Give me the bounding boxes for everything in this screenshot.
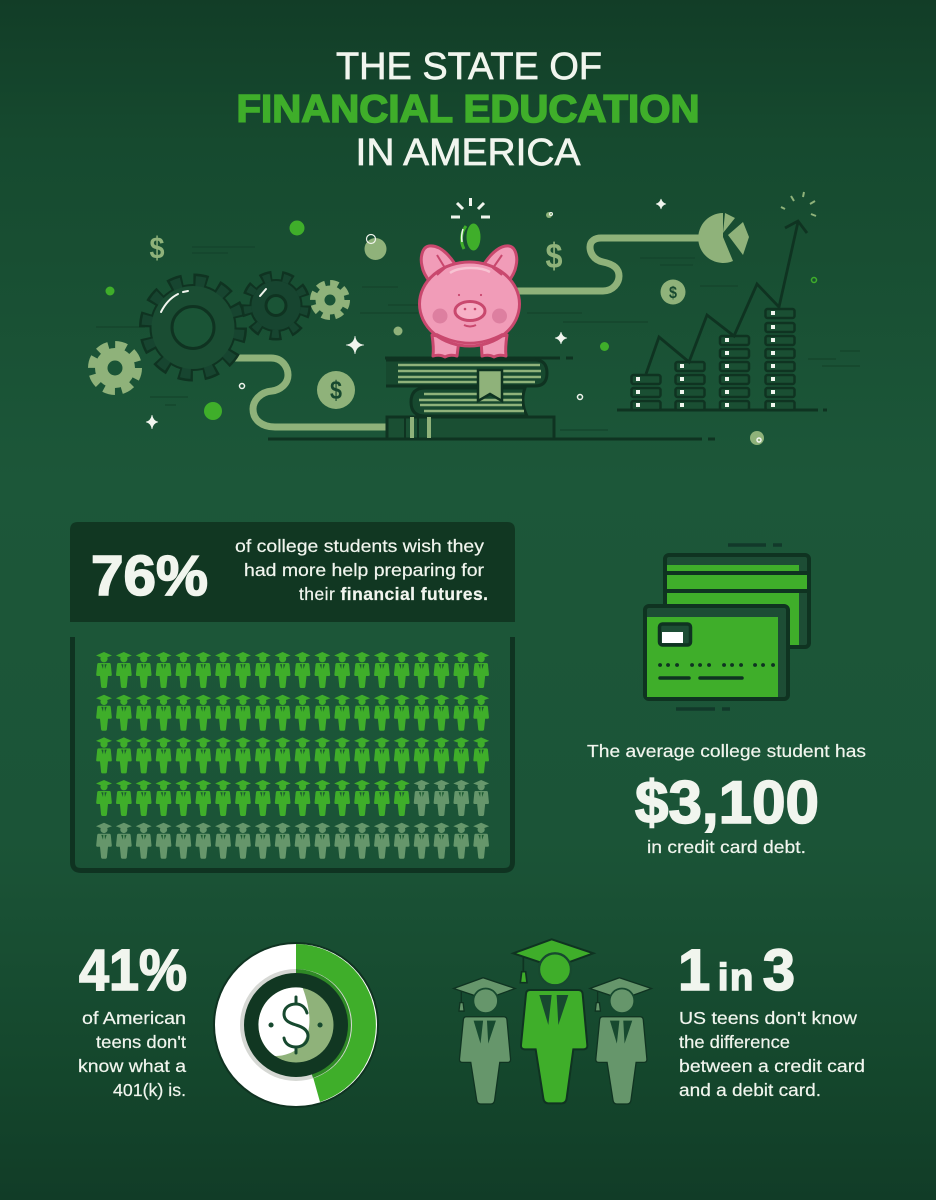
illustration: finance scene — [92, 192, 860, 445]
icon: three graduates — [454, 939, 651, 1104]
icon: dollar signs: $ — [330, 375, 342, 405]
icon: credit cards — [645, 545, 809, 709]
icon: small light gear — [314, 284, 346, 316]
header text — [235, 536, 488, 604]
title: FINANCIAL EDUCATION — [236, 88, 700, 131]
icon: left light gear — [92, 346, 138, 390]
pictogram: 76 of 100 graduates — [96, 652, 489, 859]
text: average college student debt — [587, 741, 866, 857]
text: 41% of teens: 41% — [79, 938, 187, 1003]
donut chart: 41% — [213, 942, 379, 1108]
icon: dollar signs — [150, 230, 686, 409]
icon: dollar sign — [271, 997, 320, 1053]
panel header — [70, 522, 515, 622]
text: average college student debt: in credit card debt. — [647, 837, 806, 857]
text: 1 in 3 teens: US teens don't know — [679, 1008, 857, 1028]
text: 1 in 3 teens: between a credit card — [679, 1056, 865, 1076]
icon: large gear — [146, 280, 240, 374]
frame — [72, 637, 512, 870]
connector: pig to pie chart — [517, 238, 700, 291]
icon: books — [386, 360, 554, 439]
title: THE STATE OF — [336, 46, 602, 88]
icon: pie chart — [698, 213, 749, 263]
title — [236, 46, 700, 174]
icon: piggy bank — [420, 246, 520, 357]
text: 41% of teens — [78, 938, 187, 1100]
text: 1 in 3 teens: the difference — [679, 1032, 790, 1052]
text: average college student debt: $3,100 — [635, 769, 819, 836]
text: 41% of teens: know what a — [78, 1056, 186, 1076]
statistic: 76%: 76% — [91, 544, 208, 608]
header text: had more help preparing for — [244, 560, 484, 580]
text: 1 in 3 teens — [678, 938, 865, 1100]
connector: gears to book — [233, 358, 387, 427]
arrow: growth line — [646, 192, 816, 374]
icon: rising coin stacks — [632, 309, 794, 410]
text: 41% of teens: of American — [82, 1008, 186, 1028]
panel: 76% of college students — [70, 522, 515, 870]
ground lines — [268, 358, 827, 439]
icon: dollar signs: $ — [669, 283, 677, 302]
text: 1 in 3 teens: 1in3 — [678, 938, 795, 1003]
icon: medium gear — [247, 276, 305, 334]
icon: dollar signs: $ — [150, 230, 164, 265]
title: IN AMERICA — [356, 132, 581, 174]
decorative dots — [106, 199, 816, 445]
text: average college student debt: The average college student has — [587, 741, 866, 761]
text: 41% of teens: 401(k) is. — [113, 1080, 186, 1100]
text: 1 in 3 teens: and a debit card. — [679, 1080, 821, 1100]
header text: their financial futures. — [299, 584, 488, 604]
text: 41% of teens: teens don't — [96, 1032, 186, 1052]
icon: falling coin — [451, 198, 490, 250]
icon: dollar signs: $ — [546, 237, 562, 276]
header text: of college students wish they — [235, 536, 484, 556]
